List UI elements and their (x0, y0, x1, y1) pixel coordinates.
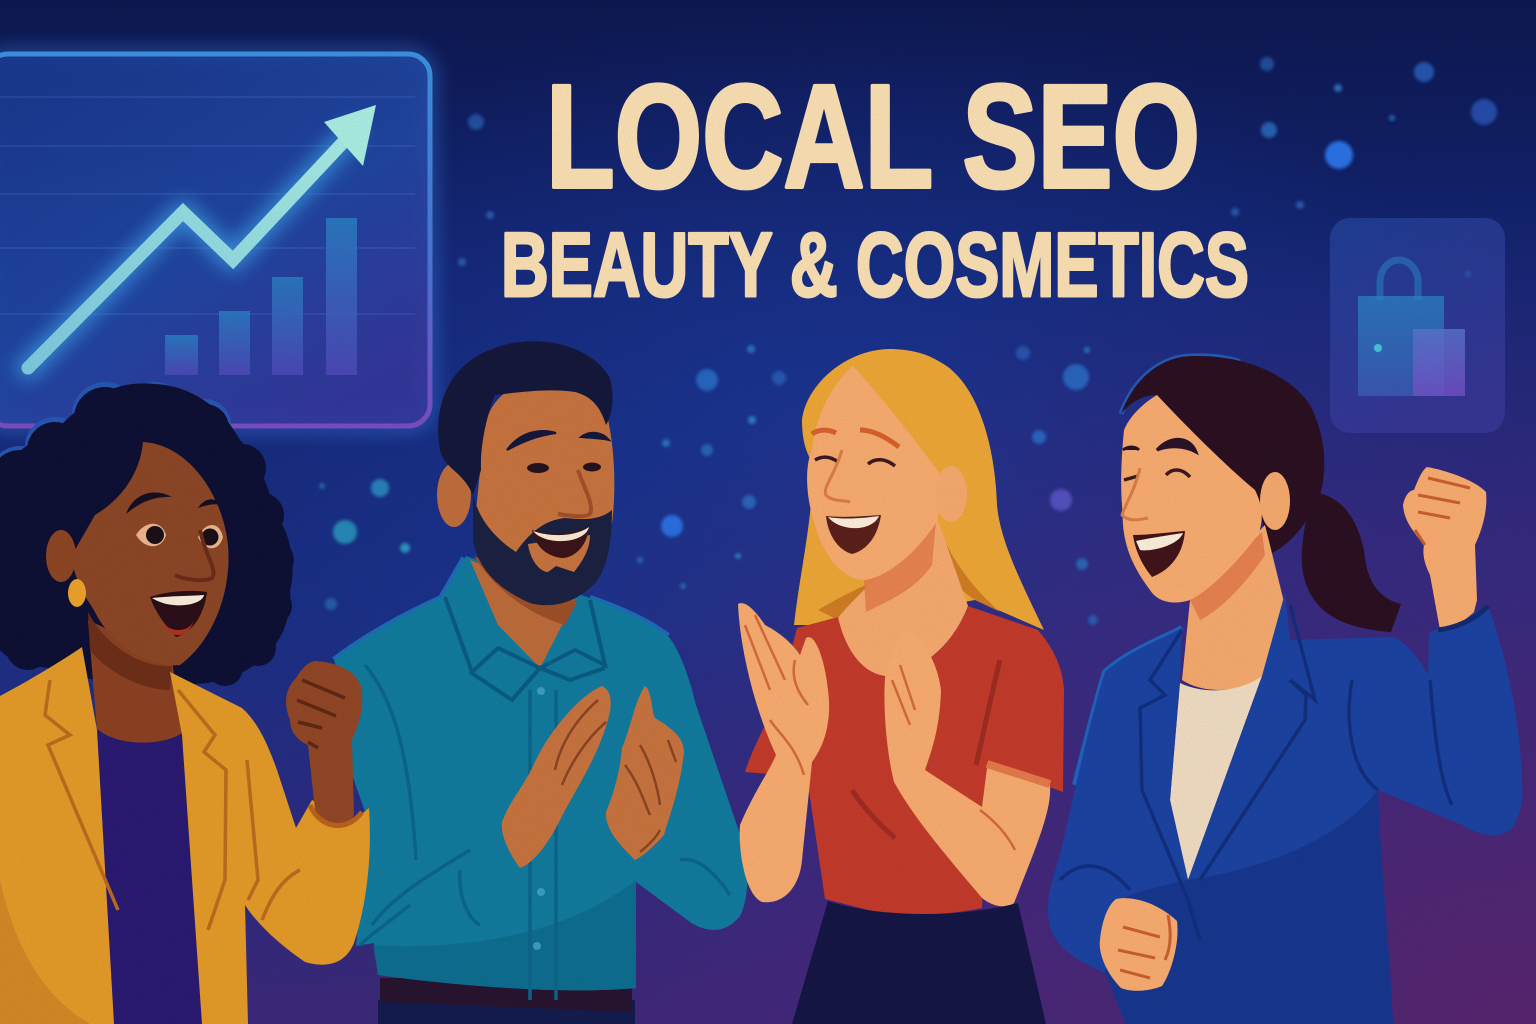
eyes (527, 462, 601, 473)
skirt (792, 901, 1046, 1024)
ear (1260, 472, 1290, 530)
jacket lapels (45, 680, 300, 930)
neck shadow (864, 522, 936, 612)
mouth (150, 591, 207, 637)
left clapping hand (502, 686, 611, 868)
right clapping hand (606, 686, 684, 860)
bar chart (165, 218, 357, 375)
panel frame (0, 54, 430, 426)
raised fist and forearm (1403, 467, 1486, 630)
face (807, 366, 941, 580)
title line 2: BEAUTY & COSMETICS (501, 215, 1249, 316)
nose (825, 450, 850, 502)
blazer (1048, 593, 1522, 1024)
right clapping hand and arm (884, 630, 1050, 906)
ear (46, 530, 76, 582)
nose (558, 470, 591, 516)
chart grid lines (0, 97, 415, 314)
eyebrows (507, 431, 609, 450)
title (501, 55, 1249, 316)
neck (88, 620, 182, 743)
blazer shadow (1105, 790, 1393, 1024)
mouth (532, 526, 589, 558)
shirt (334, 556, 748, 990)
face (72, 442, 229, 665)
shoulder rim (334, 558, 668, 660)
blazer lapels (1060, 605, 1452, 940)
eyebrows (126, 493, 224, 514)
neck shadow (88, 612, 172, 690)
cuff (1438, 606, 1488, 630)
nose (1122, 468, 1148, 520)
neck (470, 560, 575, 668)
person: woman with blonde hair (738, 349, 1064, 1024)
ear (935, 466, 967, 522)
eyebrows (1123, 439, 1196, 452)
neck shadow (1190, 532, 1265, 620)
collar (445, 597, 605, 700)
bokeh dots (319, 57, 1497, 625)
shirt folds and placket (360, 665, 730, 1000)
hair back (794, 349, 1044, 630)
eyes (136, 524, 223, 548)
arrow: upward trend (28, 105, 376, 368)
arrow glow (28, 135, 350, 368)
hair (438, 341, 613, 495)
hair rim (1121, 356, 1240, 414)
panel: shopping bag icon (1330, 218, 1505, 433)
raised fist lines (1415, 478, 1470, 545)
finger lines (297, 680, 345, 748)
mouth (826, 515, 881, 554)
hair shadow (818, 520, 1000, 620)
eyes laughing (1124, 470, 1190, 480)
person: woman in yellow jacket (0, 382, 370, 1024)
hair (1121, 356, 1324, 554)
title line 1: LOCAL SEO (546, 55, 1200, 219)
hair (0, 383, 294, 686)
neck shadow (474, 556, 577, 625)
face (1121, 395, 1262, 603)
cuff line (310, 805, 362, 826)
low fist lines (1118, 915, 1170, 978)
beard (473, 495, 612, 605)
ear (437, 463, 471, 527)
pants and belt (378, 978, 635, 1024)
hand lines (745, 615, 1015, 850)
blazer rim (1075, 628, 1182, 785)
icon: bag handle (1380, 260, 1418, 300)
ponytail (1302, 493, 1401, 632)
fist and forearm (286, 661, 362, 825)
shirt folds (852, 660, 1000, 838)
eyes laughing (815, 457, 895, 466)
person: woman in blue blazer (1048, 356, 1522, 1024)
panel: growth chart (0, 54, 430, 426)
eyebrows (812, 430, 899, 447)
shirt buttons (533, 687, 545, 950)
icon: small bag (1413, 329, 1465, 396)
inner top (97, 729, 202, 1024)
neck (1182, 525, 1285, 690)
panel glow (0, 54, 430, 426)
icon: bag sparkle (1374, 344, 1382, 352)
sleeve hem shadow (987, 764, 1050, 784)
earring (68, 579, 86, 607)
shirt shadow (373, 880, 636, 990)
left clapping hand and arm (738, 603, 829, 902)
neck (838, 515, 968, 676)
icon: large bag (1358, 296, 1444, 396)
nose (175, 530, 214, 580)
skin below mouth (528, 535, 590, 572)
mouth (1133, 531, 1185, 577)
face (475, 383, 614, 595)
low fist (1100, 898, 1178, 991)
person: man in teal shirt (334, 341, 748, 1024)
shirt (745, 606, 1064, 915)
jacket (0, 647, 370, 1024)
jacket shadow fold (0, 880, 90, 1024)
hair rim (0, 382, 231, 510)
cream top (1170, 676, 1262, 880)
hand lines (555, 700, 676, 852)
